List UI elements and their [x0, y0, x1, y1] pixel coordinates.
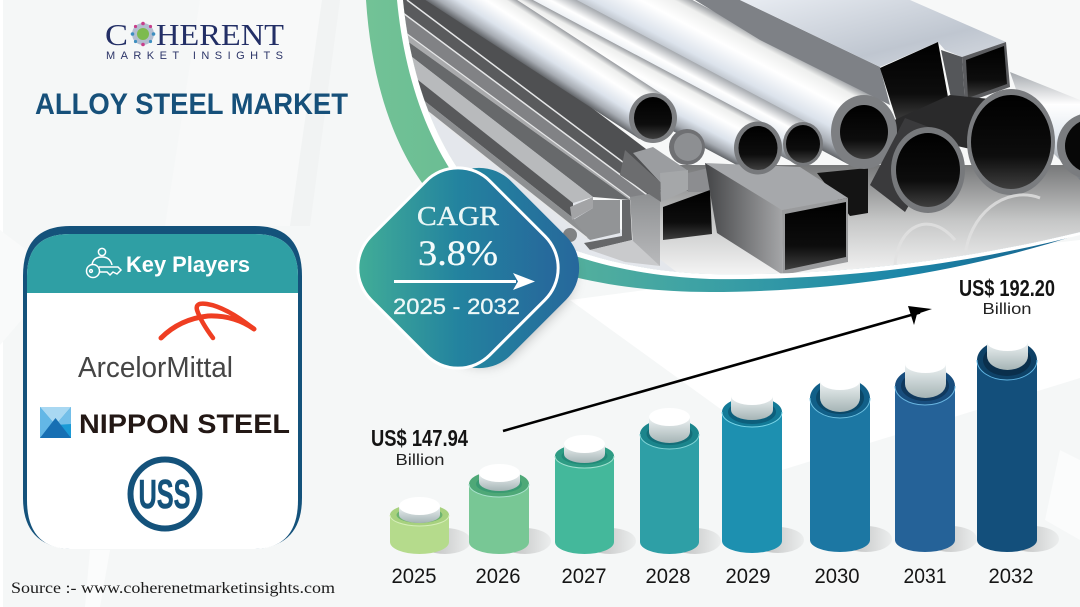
- pipe ends: [629, 89, 1080, 213]
- year labels: 2030: [814, 565, 860, 588]
- logo: Coherent Market Insights: [105, 17, 284, 62]
- bar 2028: [640, 408, 721, 554]
- year labels: 2028: [646, 565, 690, 588]
- year labels: 2031: [904, 565, 946, 588]
- logo: USS: USS: [138, 471, 190, 517]
- panel: key players: [23, 226, 302, 549]
- year labels: 2027: [562, 565, 606, 588]
- dark gap behind pipe ends: [895, 95, 986, 148]
- photo: steel pipes and bars: [375, 0, 1080, 290]
- CAGR value: 3.8%: [418, 233, 498, 273]
- logo: Coherent Market Insights: C: [105, 17, 128, 52]
- bar 2032: [977, 333, 1059, 552]
- value: 2025: US$ 147.94: [371, 425, 468, 451]
- value: 2025: Billion: [396, 452, 444, 469]
- bar 2026: [469, 464, 551, 554]
- square tube: lower: [705, 163, 848, 275]
- bar 2025: [390, 497, 471, 554]
- icon: key and person: [86, 248, 121, 278]
- year labels: 2025: [392, 565, 436, 588]
- arrow: CAGR: [394, 273, 535, 290]
- value: 2032: US$ 192.20: [959, 275, 1055, 301]
- pipes: long tubes: [426, 0, 873, 164]
- logo: ArcelorMittal: ArcelorMittal: [78, 352, 233, 384]
- title: ALLOY STEEL MARKET: [35, 88, 348, 121]
- badge: CAGR: [339, 149, 598, 387]
- logo: ArcelorMittal: [78, 304, 254, 384]
- logo: Nippon Steel: NIPPON STEEL: [79, 409, 290, 439]
- bar 2029: [722, 387, 804, 553]
- floor: [650, 165, 1080, 277]
- heading: key players: Key Players: [126, 252, 250, 277]
- year labels: 2026: [476, 565, 520, 588]
- value: 2025: [371, 425, 468, 469]
- logo: Coherent Market Insights: HERENT: [156, 17, 284, 52]
- value: 2032: [959, 275, 1055, 318]
- floor reflections: [895, 195, 1040, 265]
- badge front shape: [339, 149, 577, 387]
- bar 2027: [555, 435, 636, 554]
- value: 2032: Billion: [982, 301, 1032, 318]
- panel header: [27, 234, 298, 293]
- arrow: market growth: [503, 306, 932, 431]
- badge shadow: [377, 169, 589, 381]
- year labels: 2032: [988, 565, 1034, 588]
- CAGR label: CAGR: [417, 200, 500, 231]
- year labels: 2029: [726, 565, 770, 588]
- bar chart: cylinders: [390, 333, 1059, 554]
- logo: Coherent Market Insights: MARKET INSIGHTS: [106, 50, 283, 62]
- rear black box: [817, 168, 868, 216]
- square tubes: upper: [695, 0, 1080, 180]
- source line: Source :- www.coherenetmarketinsights.com: [11, 580, 335, 597]
- year labels: [392, 565, 1034, 588]
- bar 2030: [810, 372, 892, 552]
- icon: logo globe of dots: [131, 22, 155, 46]
- logo: USS: [130, 460, 200, 528]
- CAGR years: 2025 - 2032: [393, 294, 520, 319]
- bar end faces: [570, 197, 593, 220]
- decorative ring around photo: [366, 0, 1080, 292]
- badge back shape: [360, 149, 598, 387]
- bars: long angle stock: [400, 0, 712, 290]
- bar 2031: [895, 355, 977, 552]
